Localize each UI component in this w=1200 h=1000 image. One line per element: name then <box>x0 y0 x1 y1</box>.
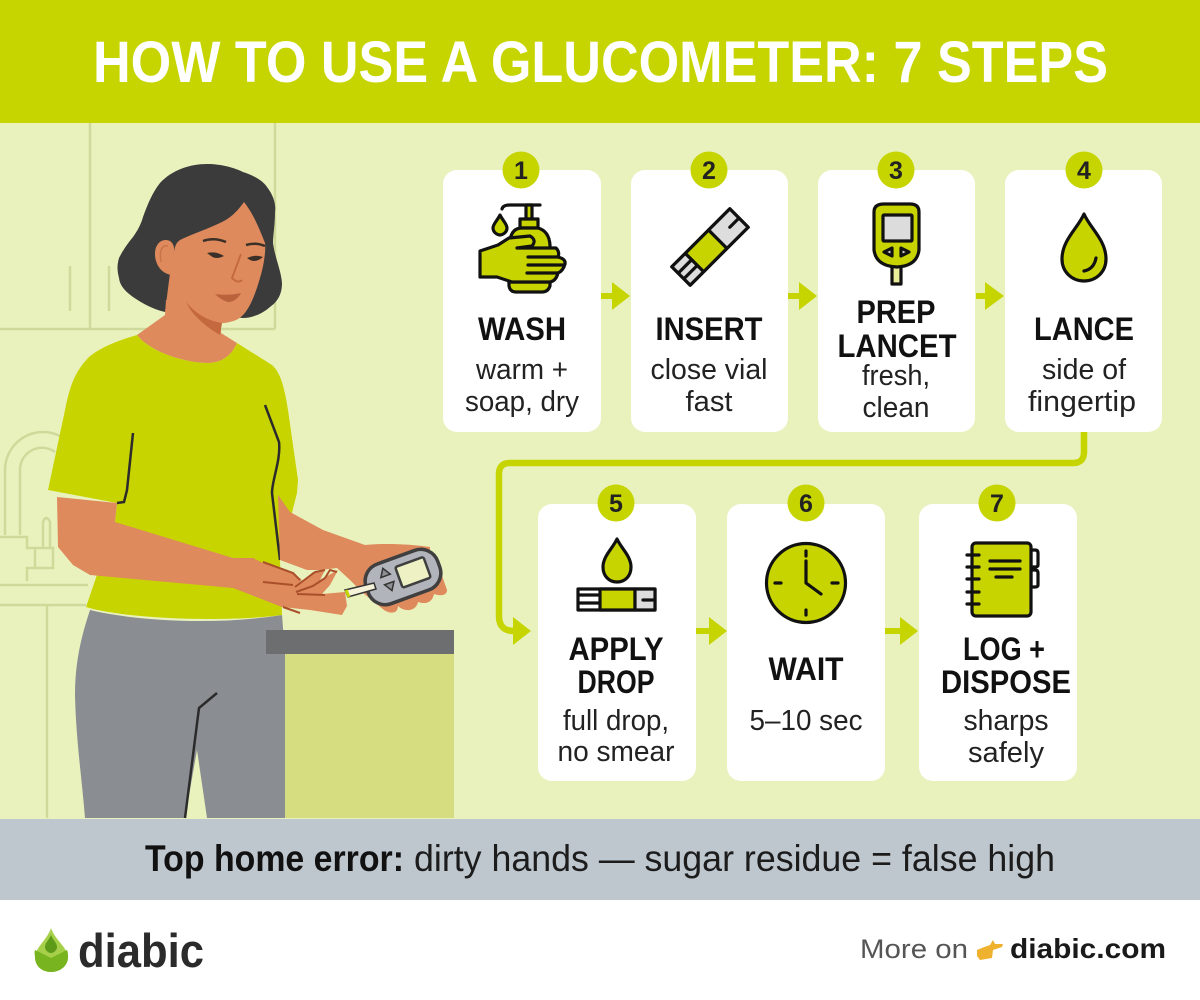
website link <box>860 933 1166 964</box>
header band <box>0 0 1200 123</box>
step 5 card <box>538 484 696 781</box>
shirt <box>48 335 298 619</box>
logo: diabic <box>78 924 204 977</box>
icon: pointing hand <box>977 940 1003 960</box>
step 2 card: close vial <box>650 354 768 386</box>
warning bar <box>0 819 1200 900</box>
step 1 card: soap, dry <box>465 386 579 418</box>
step 6 card <box>727 484 885 781</box>
step 2 card: fast <box>686 386 732 418</box>
background panel <box>0 123 1200 819</box>
illustration: woman with glucometer <box>48 164 447 818</box>
icon: clock <box>766 544 846 622</box>
icon: test strip <box>672 209 748 285</box>
icon: glucometer <box>874 204 919 284</box>
kitchen background line art <box>0 123 275 818</box>
step 4 card: side of <box>1042 354 1127 386</box>
hair <box>118 164 282 318</box>
face <box>165 202 265 324</box>
glucometer in hand <box>360 544 446 610</box>
arrow 5 to 6 <box>696 617 727 645</box>
facial features <box>203 239 265 302</box>
step 5 card: DROP <box>578 664 654 700</box>
ear <box>155 240 174 275</box>
warning bar: dirty hands — sugar residue = false high <box>414 838 1055 879</box>
arrow 2 to 3 <box>788 282 817 310</box>
step 3 card: clean <box>862 392 930 424</box>
website link: More on <box>860 934 968 964</box>
pants <box>75 610 285 818</box>
step 2 card <box>631 152 788 432</box>
icon: notebook <box>967 543 1038 616</box>
warning bar: Top home error: <box>145 838 404 879</box>
title: HOW TO USE A GLUCOMETER: 7 STEPS <box>93 30 1108 95</box>
label: wait: WAIT <box>768 651 844 687</box>
step 2 card: 2 <box>702 157 716 185</box>
step 5 card: no smear <box>558 736 675 768</box>
step 3 card <box>818 152 975 432</box>
website link: diabic.com <box>1010 933 1166 964</box>
step 6 card: 6 <box>799 490 813 518</box>
arrow 3 to 4 <box>976 282 1004 310</box>
step 1 card: 1 <box>514 157 528 185</box>
icon: drop on strip <box>578 539 655 610</box>
test strip <box>345 583 376 597</box>
label: log and dispose: LOG + <box>963 631 1045 667</box>
arm with lanced finger <box>57 497 347 615</box>
step 5 card: full drop, <box>563 705 669 737</box>
step 7 card: safely <box>968 737 1044 769</box>
step 3 card: 3 <box>889 157 903 185</box>
label: wash: WASH <box>478 311 566 347</box>
step 1 card <box>443 152 601 432</box>
kitchen counter <box>266 630 454 818</box>
neck <box>137 300 237 363</box>
step 3 card: LANCET <box>838 328 957 364</box>
step 6 card: 5–10 sec <box>750 705 862 737</box>
icon: blood drop <box>1062 214 1106 281</box>
arrow 1 to 2 <box>601 282 630 310</box>
bottom connector arrow <box>499 432 1084 645</box>
label: insert: INSERT <box>656 311 763 347</box>
step 1 card: warm + <box>475 354 568 386</box>
label: lance: LANCE <box>1034 311 1134 347</box>
step 7 card: DISPOSE <box>941 664 1071 700</box>
step 4 card <box>1005 152 1162 432</box>
label: prep lancet: PREP <box>856 294 936 330</box>
jaw shadow <box>186 302 222 335</box>
step 4 card: 4 <box>1077 157 1091 185</box>
step 4 card: fingertip <box>1028 386 1136 418</box>
arm holding meter <box>278 495 447 613</box>
step 5 card: 5 <box>609 490 623 518</box>
step 7 card <box>919 484 1077 781</box>
step 7 card: sharps <box>964 705 1048 737</box>
icon: soap and washing hands <box>480 205 565 292</box>
label: apply drop: APPLY <box>568 631 664 667</box>
arrow 6 to 7 <box>885 617 918 645</box>
step 3 card: fresh, <box>862 360 930 392</box>
step 7 card: 7 <box>990 490 1004 518</box>
